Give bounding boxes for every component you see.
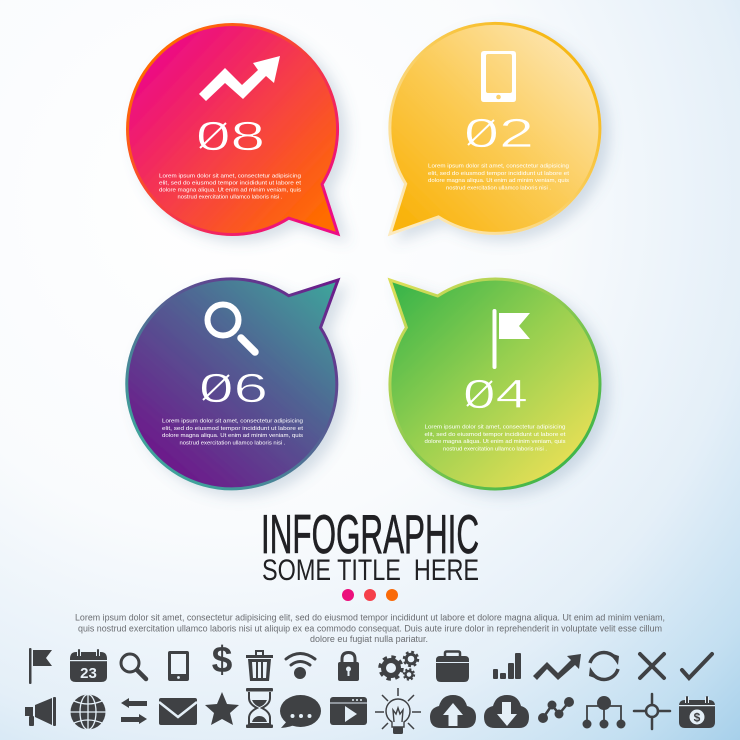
- icon: cloud download: [484, 695, 529, 728]
- number 06: [199, 365, 268, 411]
- panel: 04 green speech bubble: [390, 279, 600, 489]
- icon: check mark: [682, 654, 712, 678]
- text block: elit, sed do eiusmod tempor incididunt ut labore et: [162, 426, 303, 432]
- text block: elit, sed do eiusmod tempor incididunt ut labore et: [159, 180, 302, 186]
- icon row 1: [29, 639, 712, 684]
- icon: dollar calendar: [679, 697, 715, 728]
- paragraph: [75, 612, 665, 645]
- icon: trend arrow: [199, 56, 280, 101]
- text block: dolore magna aliqua. Ut enim ad minim veniam, quis: [159, 188, 301, 194]
- number 04: 04: [463, 371, 528, 417]
- text block: Lorem ipsum dolor sit amet, consectetur adipisicing: [428, 164, 569, 170]
- text block: nostrud exercitation ullamco laboris nisi .: [180, 440, 286, 446]
- number 02: [464, 110, 534, 156]
- icon: transfer arrows: [121, 698, 147, 724]
- icon: connected nodes: [538, 697, 574, 723]
- text block: [428, 164, 569, 192]
- icon: calendar 23: [70, 649, 107, 682]
- text block: dolore magna aliqua. Ut enim ad minim veniam, quis: [424, 439, 566, 445]
- icon: close cross: [640, 654, 664, 678]
- icon: hierarchy: [582, 696, 626, 728]
- text block: dolore magna aliqua. Ut enim ad minim veniam, quis: [428, 178, 569, 184]
- icon row 2: [25, 688, 715, 734]
- icon: hourglass: [246, 688, 273, 728]
- text block: Lorem ipsum dolor sit amet, consectetur adipisicing: [159, 174, 301, 180]
- text block: nostrud exercitation ullamco laboris nisi .: [446, 186, 551, 192]
- text block: dolore magna aliqua. Ut enim ad minim veniam, quis: [162, 433, 303, 439]
- icon: gears: [380, 652, 418, 680]
- text block: nostrud exercitation ullamco laboris nisi .: [178, 194, 283, 200]
- icon: mail: [159, 698, 197, 725]
- icon: briefcase: [436, 652, 469, 682]
- subtitle: SOME TITLE HERE: [262, 554, 479, 587]
- icon: tablet: [168, 651, 189, 681]
- bubble shape: [390, 23, 600, 234]
- icon: bar chart: [493, 653, 521, 679]
- icon: cloud upload: [430, 695, 476, 728]
- paragraph: dolore eu fugiat nulla pariatur.: [310, 634, 428, 645]
- icon: wifi: [286, 654, 315, 679]
- icon: magnifier: [208, 304, 255, 352]
- icon: dollar: $: [212, 639, 233, 680]
- text block: [162, 418, 303, 446]
- text block: [159, 174, 302, 200]
- icon: refresh: [589, 653, 619, 679]
- icon: dollar calendar: $: [694, 710, 701, 724]
- number 02: 02: [464, 110, 534, 156]
- icon: trend arrow: [533, 654, 581, 680]
- number 08: [196, 113, 265, 159]
- panel: 06 purple speech bubble: [127, 279, 338, 489]
- title: INFOGRAPHIC: [261, 503, 479, 565]
- icon: trash: [246, 650, 273, 681]
- number 08: 08: [196, 113, 265, 159]
- icon: light bulb: [375, 688, 421, 734]
- icon: megaphone: [25, 697, 56, 726]
- icon: calendar 23: 23: [80, 665, 97, 682]
- icon: speech bubble: [280, 695, 321, 728]
- panel: 08 red speech bubble: [128, 24, 338, 234]
- text block: Lorem ipsum dolor sit amet, consectetur adipisicing: [162, 418, 303, 424]
- icon: flag: [492, 309, 530, 369]
- paragraph: quis nostrud exercitation ullamco laboris nisi ut aliquip ex ea commodo consequat. Duis aute irure dolor in reprehenderit in voluptate velit esse cillum: [78, 624, 662, 634]
- bubble shape: [128, 24, 338, 234]
- icon: crosshair: [634, 694, 670, 729]
- number 06: 06: [199, 365, 268, 411]
- text block: elit, sed do eiusmod tempor incididunt ut labore et: [424, 432, 566, 438]
- text block: nostrud exercitation ullamco laboris nisi .: [443, 446, 547, 452]
- text block: Lorem ipsum dolor sit amet, consectetur adipisicing: [424, 424, 566, 430]
- icon: padlock: [338, 652, 359, 681]
- icon: search: [121, 654, 146, 679]
- icon: smartphone: [481, 51, 516, 102]
- three accent dots: [342, 589, 398, 601]
- bubble shape: [127, 279, 338, 489]
- icon: star: [205, 692, 239, 725]
- panel: 02 yellow speech bubble: [390, 23, 600, 234]
- paragraph: Lorem ipsum dolor sit amet, consectetur adipisicing elit, sed do eiusmod tempor incididunt ut labore et dolore magna aliqua. Ut enim ad minim veniam,: [75, 612, 665, 624]
- icon: flag: [29, 648, 52, 684]
- icon: video player: [330, 697, 367, 725]
- text block: elit, sed do eiusmod tempor incididunt ut labore et: [428, 171, 569, 177]
- text block: [424, 424, 566, 452]
- bubble shape: [390, 279, 600, 489]
- icon: globe: [70, 694, 106, 730]
